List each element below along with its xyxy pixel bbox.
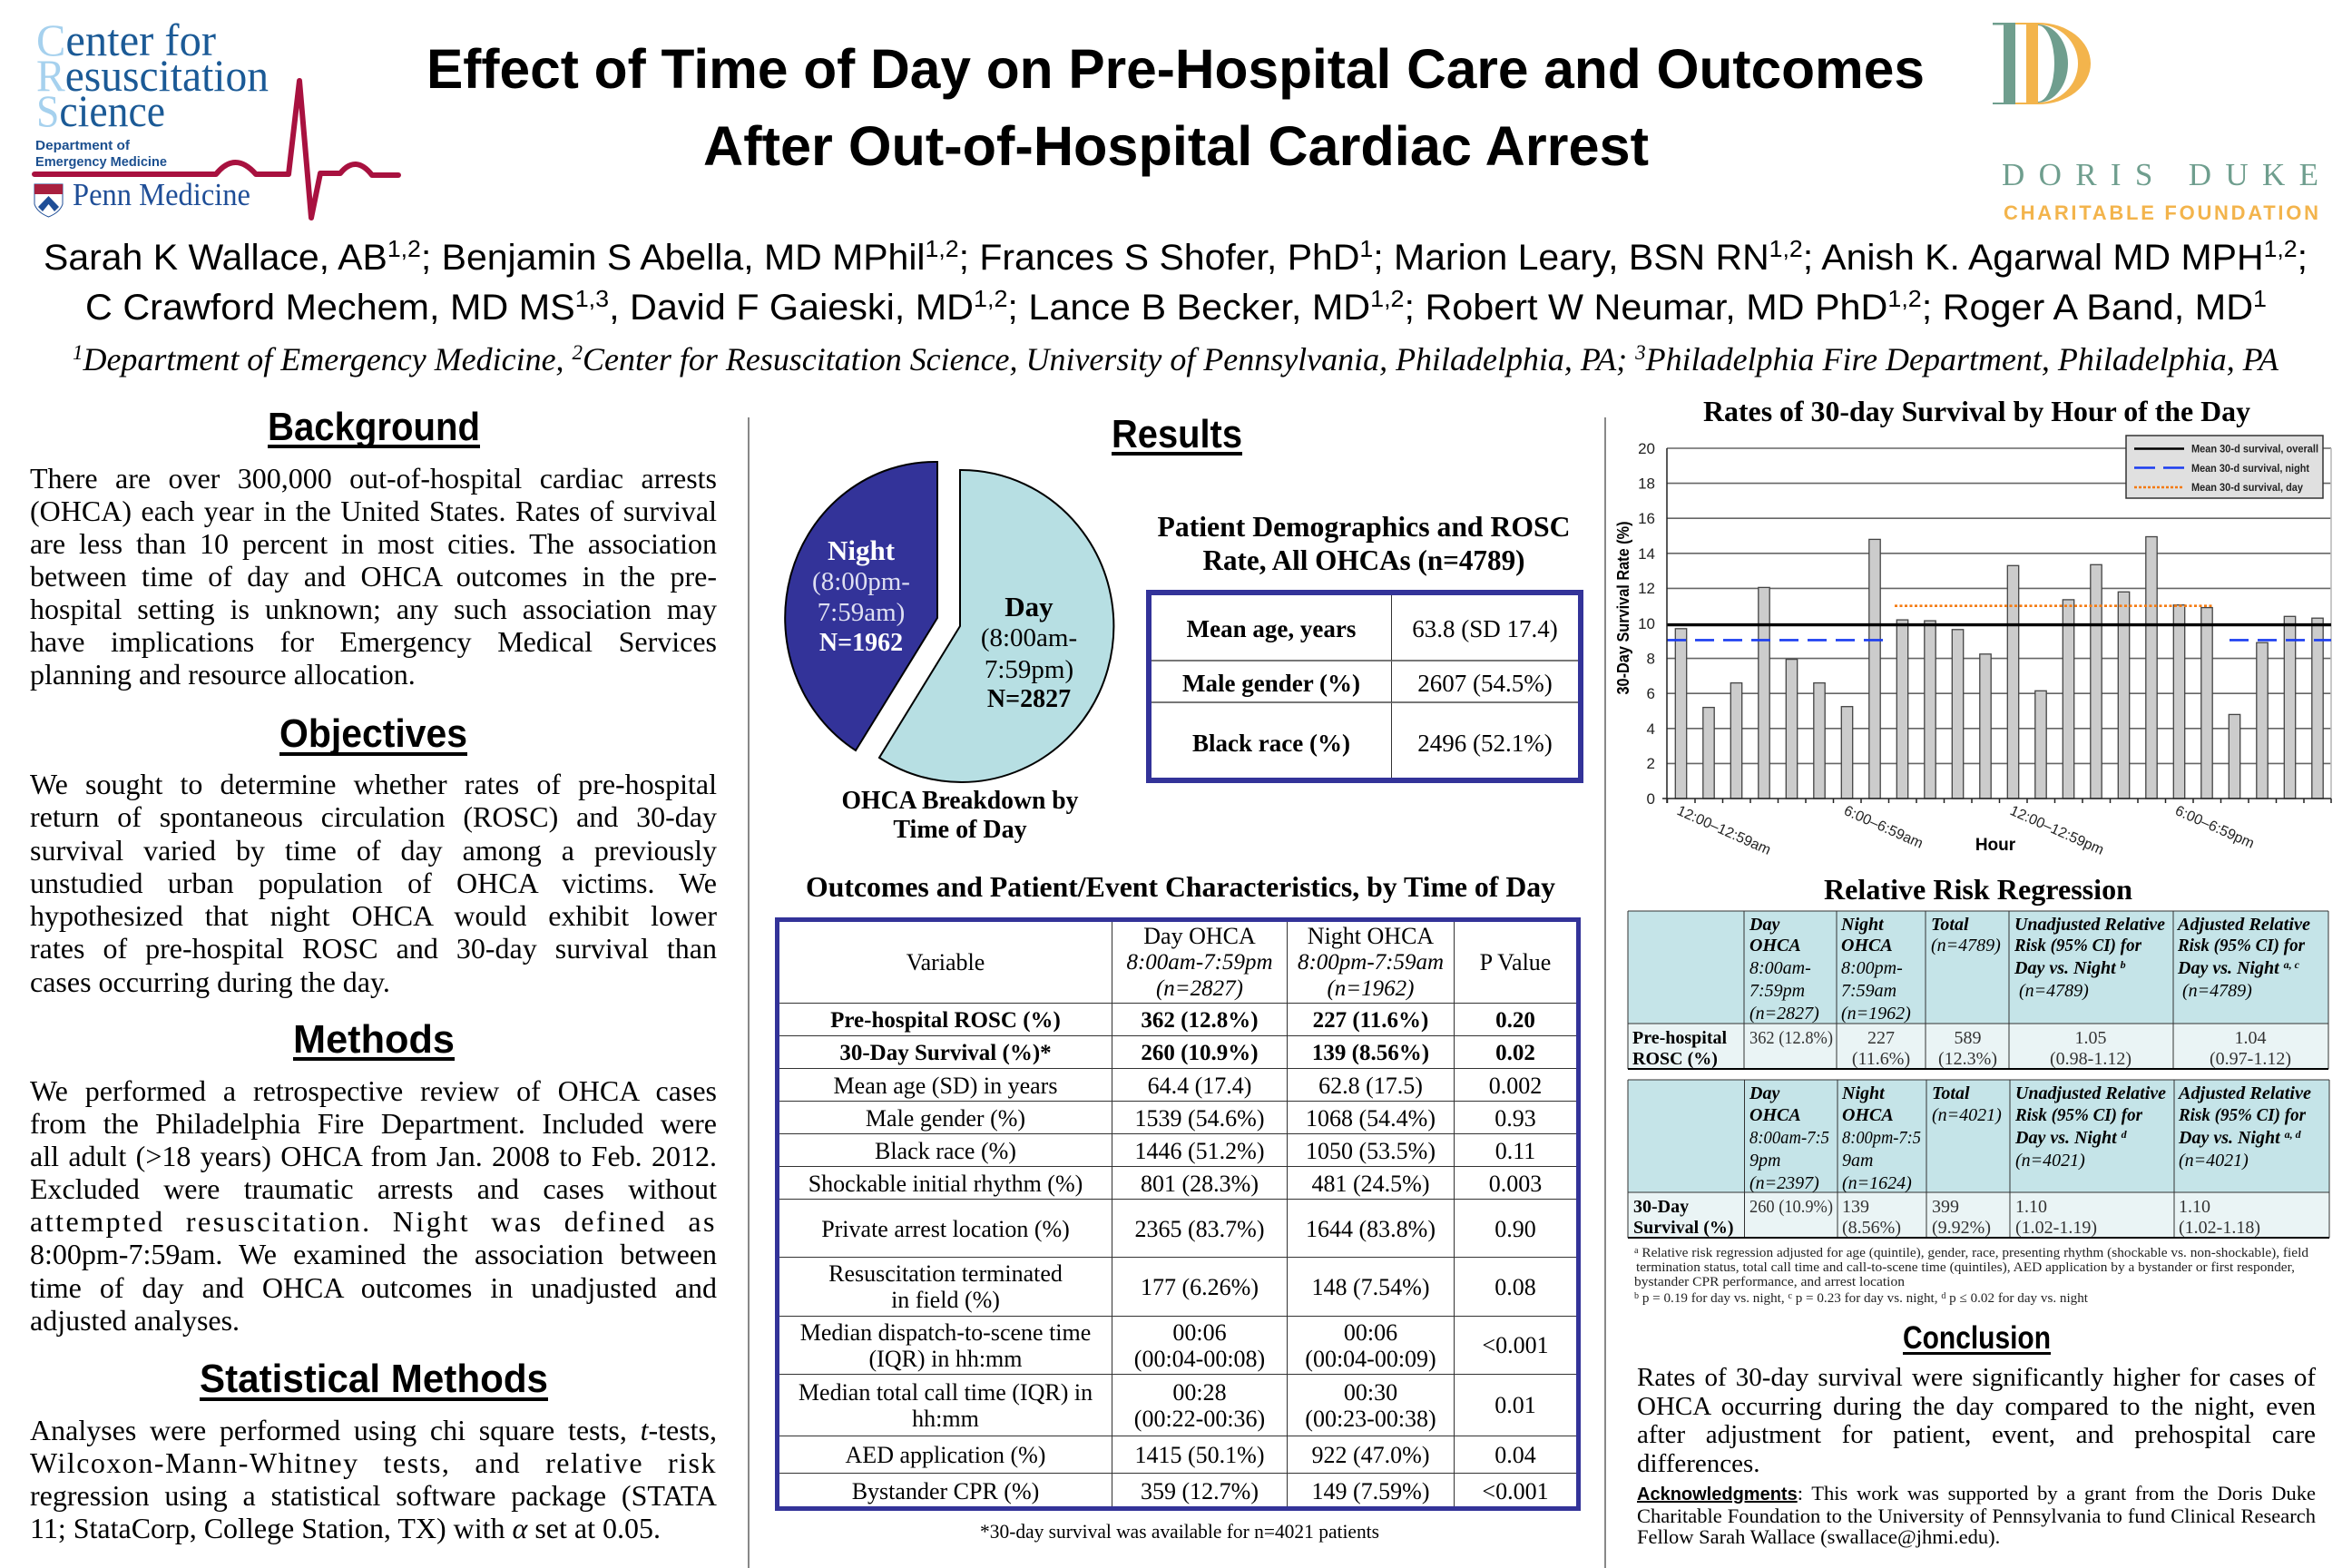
pie slice: Night: (8:00pm-	[812, 567, 910, 596]
text: Conclusion: after adjustment for patient, event, and prehospital care	[1637, 1420, 2316, 1449]
table: outcomes and patient/event characteristics: 0.01	[1494, 1392, 1536, 1418]
y axis labels	[1638, 440, 1655, 808]
text: Objectives: hypothesized that night OHCA would exhibit lower	[30, 899, 717, 932]
affiliations: 3	[1634, 341, 1646, 364]
table: outcomes and patient/event characteristics: 00:28	[1172, 1379, 1227, 1405]
table: patient demographics: 63.8 (SD 17.4)	[1412, 615, 1558, 642]
regression footnotes: a	[1634, 1246, 1639, 1256]
text: Methods: 8:00pm-7:59am. We examined the association between	[30, 1238, 717, 1270]
table: relative risk for 30-day survival: Day vs. Night	[2179, 1128, 2280, 1148]
text: Methods: Excluded were traumatic arrests and cases without	[30, 1172, 717, 1205]
heading: Background: Background	[268, 405, 480, 449]
affiliations: 1	[73, 341, 83, 364]
table: relative risk for 30-day survival: 8:00am-7:5	[1749, 1128, 1829, 1148]
text: Methods: all adult (>18 years) OHCA from Jan. 2008 to Feb. 2012.	[30, 1140, 717, 1172]
heading: Patient Demographics: Rate, All OHCAs (n=4789)	[1203, 544, 1524, 576]
table: relative risk for pre-hospital ROSC: Total	[1931, 915, 1969, 935]
title: After Out-of-Hospital Cardiac Arrest	[703, 115, 1649, 177]
table: outcomes and patient/event characteristics: 801 (28.3%)	[1141, 1171, 1259, 1197]
heading: Patient Demographics: Patient Demographics and ROSC	[1158, 510, 1570, 543]
table: outcomes and patient/event characteristics: 0.20	[1495, 1008, 1535, 1033]
regression footnotes: Relative risk regression adjusted for age (quintile), gender, race, presenting rhythm (shockable vs. non-shockable), field	[1639, 1246, 2309, 1260]
text: Background: (OHCA) each year in the United States. Rates of survival	[30, 495, 717, 527]
text: Conclusion: OHCA occurring during the day compared to the night, even	[1637, 1392, 2316, 1421]
table: outcomes and patient/event characteristics: 362 (12.8%)	[1141, 1008, 1259, 1033]
regression footnotes: p = 0.19 for day vs. night,	[1639, 1291, 1788, 1306]
table: relative risk for pre-hospital ROSC: Pre-hospital	[1632, 1028, 1728, 1048]
table: relative risk for 30-day survival: (1.02-1.18)	[2179, 1218, 2260, 1238]
heading: survival chart: Rates of 30-day Survival by Hour of the Day	[1703, 395, 2250, 427]
table: relative risk for pre-hospital ROSC: Risk (95% CI) for	[2177, 936, 2305, 956]
y axis labels: 10	[1638, 615, 1655, 632]
grid lines	[1667, 448, 2331, 799]
table: relative risk for 30-day survival: 8:00pm-7:5	[1842, 1128, 1921, 1148]
table: relative risk for pre-hospital ROSC: OHCA	[1841, 936, 1893, 956]
table: patient demographics: 2607 (54.5%)	[1417, 670, 1553, 697]
table: relative risk for 30-day survival: d	[2122, 1128, 2128, 1141]
table: outcomes and patient/event characteristics: <0.001	[1482, 1332, 1549, 1358]
authors: ; Benjamin S Abella, MD MPhil	[421, 238, 926, 278]
table: outcomes and patient/event characteristics: AED application (%)	[846, 1441, 1045, 1468]
authors: 1	[2253, 285, 2267, 312]
pie caption: Time of Day	[893, 816, 1027, 844]
text: Objectives: survival varied by time of day among a previously	[30, 834, 717, 867]
logo: Center for Resuscitation Science, Penn Medicine: Department of	[35, 138, 131, 153]
table: relative risk for pre-hospital ROSC: (n=4789)	[2182, 981, 2252, 1001]
table: relative risk for 30-day survival: Survival (%)	[1633, 1218, 1734, 1238]
y axis labels: 12	[1638, 580, 1655, 597]
text: Objectives: return of spontaneous circulation (ROSC) and 30-day	[30, 800, 717, 833]
table: outcomes and patient/event characteristics: 64.4 (17.4)	[1148, 1073, 1251, 1099]
table: outcomes and patient/event characteristics: 149 (7.59%)	[1312, 1477, 1429, 1504]
table: relative risk for pre-hospital ROSC: a, c	[2284, 958, 2300, 971]
table: relative risk for 30-day survival: 1.10	[2015, 1197, 2047, 1217]
logo: Center for Resuscitation Science, Penn Medicine: Science	[36, 85, 165, 136]
table: relative risk for 30-day survival	[1628, 1080, 2329, 1238]
table: relative risk for 30-day survival: 1.10	[2179, 1197, 2210, 1217]
authors: 1,2	[926, 235, 959, 262]
text: Statistical Methods: Wilcoxon-Mann-Whitney tests, and relative risk	[30, 1446, 717, 1479]
table: relative risk for 30-day survival: Night	[1841, 1083, 1886, 1103]
mean overall line	[1667, 623, 2331, 626]
y axis title: 30-Day Survival Rate (%)	[1614, 521, 1632, 695]
text: Methods: attempted resuscitation. Night was defined as	[30, 1205, 717, 1238]
regression footnotes: termination status, total call time and call-to-scene time (quintiles), AED application by a bystander or first responder,	[1636, 1260, 2295, 1275]
text: Methods: We performed a retrospective review of OHCA cases	[30, 1074, 717, 1107]
y axis labels: 4	[1647, 720, 1655, 738]
table: outcomes and patient/event characteristics: Day OHCA	[1143, 922, 1256, 949]
axes	[1662, 448, 2331, 803]
table: relative risk for pre-hospital ROSC: (n=4789)	[2019, 981, 2089, 1001]
table: relative risk for 30-day survival: 139	[1842, 1197, 1869, 1217]
table: outcomes and patient/event characteristics: 260 (10.9%)	[1141, 1041, 1259, 1065]
text: Background: There are over 300,000 out-of-hospital cardiac arrests	[30, 462, 717, 495]
table: relative risk for 30-day survival: (n=4021)	[1932, 1105, 2002, 1125]
table: outcomes and patient/event characteristics: in field (%)	[891, 1287, 1000, 1313]
table: outcomes and patient/event characteristics: 30-Day Survival (%)*	[839, 1041, 1052, 1065]
table: relative risk for 30-day survival: 260 (10.9%)	[1749, 1197, 1833, 1217]
authors: ; Roger A Band, MD	[1922, 288, 2253, 328]
table: relative risk for 30-day survival: OHCA	[1842, 1105, 1894, 1125]
table: outcomes and patient/event characteristics: (00:23-00:38)	[1305, 1405, 1436, 1432]
table: outcomes and patient/event characteristics: Male gender (%)	[866, 1105, 1025, 1132]
table: outcomes and patient/event characteristics: (n=2827)	[1156, 976, 1243, 1000]
outcomes footnote: *30-day survival was available for n=4021 patients	[980, 1520, 1379, 1543]
table: relative risk for 30-day survival: Total	[1932, 1083, 1970, 1103]
table: relative risk for 30-day survival: (8.56%)	[1842, 1218, 1901, 1238]
heading: Objectives: Objectives	[279, 711, 467, 756]
heading: Statistical Methods: Statistical Methods	[200, 1357, 548, 1401]
affiliations: Center for Resuscitation Science, University of Pennsylvania, Philadelphia, PA;	[583, 341, 1635, 377]
table: relative risk for pre-hospital ROSC: (n=2827)	[1749, 1004, 1819, 1024]
authors: ; Marion Leary, BSN RN	[1373, 238, 1769, 278]
table: relative risk for pre-hospital ROSC: Risk (95% CI) for	[2014, 936, 2141, 956]
text: Conclusion: differences.	[1637, 1448, 1760, 1477]
table: relative risk for pre-hospital ROSC: Adjusted Relative	[2176, 915, 2310, 935]
y axis labels: 20	[1638, 440, 1655, 457]
y axis labels: 16	[1638, 510, 1655, 527]
bars	[1675, 537, 2323, 799]
table: relative risk for pre-hospital ROSC: 8:00pm-	[1841, 958, 1903, 978]
text: Statistical Methods	[30, 1414, 717, 1544]
authors: 1,2	[387, 235, 421, 262]
text: Background	[30, 462, 717, 691]
text: Background: have implications for Emergency Medical Services	[30, 625, 717, 658]
logo: Doris Duke Charitable Foundation: CHARITABLE FOUNDATION	[2004, 201, 2318, 224]
table: outcomes and patient/event characteristics: 227 (11.6%)	[1313, 1008, 1428, 1033]
text: Acknowledgments	[1637, 1482, 2316, 1548]
regression footnotes: c	[1788, 1291, 1792, 1301]
y axis labels: 18	[1638, 475, 1655, 493]
pie slice: Day: (8:00am-	[981, 623, 1077, 652]
table: relative risk for pre-hospital ROSC: (0.98-1.12)	[2050, 1049, 2132, 1069]
table: outcomes and patient/event characteristics: hh:mm	[912, 1405, 979, 1432]
table: outcomes and patient/event characteristics: 0.04	[1494, 1441, 1536, 1468]
table: relative risk for pre-hospital ROSC: 227	[1867, 1028, 1895, 1048]
regression footnotes: p ≤ 0.02 for day vs. night	[1945, 1291, 2089, 1306]
authors: ;	[2298, 238, 2308, 278]
table: patient demographics: 2496 (52.1%)	[1417, 730, 1553, 757]
logo: Doris Duke Charitable Foundation: DORIS DUKE	[2002, 157, 2318, 192]
text: Objectives: rates of pre-hospital ROSC and 30-day survival than	[30, 932, 717, 965]
table: relative risk for 30-day survival: Day vs. Night	[2015, 1128, 2117, 1148]
text: Conclusion: Rates of 30-day survival were significantly higher for cases of	[1637, 1363, 2316, 1392]
table: relative risk for 30-day survival: (n=4021)	[2179, 1151, 2249, 1171]
chart legend: Mean 30-d survival, overall	[2191, 445, 2318, 456]
text: Background: are less than 10 percent in most cities. The association	[30, 527, 717, 560]
x axis labels: 12:00–12:59pm	[2007, 803, 2106, 858]
affiliations: 2	[573, 341, 583, 364]
text: Background: hospital setting is unknown; any such association may	[30, 593, 717, 625]
table: outcomes and patient/event characteristics: Median dispatch-to-scene time	[800, 1319, 1091, 1345]
table: outcomes and patient/event characteristics: 1050 (53.5%)	[1306, 1138, 1436, 1164]
table: outcomes and patient/event characteristics: <0.001	[1482, 1477, 1549, 1504]
text: Background: planning and resource allocation.	[30, 658, 416, 691]
heading: Relative Risk Regression: Relative Risk Regression	[1824, 873, 2132, 906]
logo: Doris Duke Charitable Foundation	[1993, 23, 2318, 224]
table: outcomes and patient/event characteristics: 00:06	[1344, 1319, 1397, 1345]
table: outcomes and patient/event characteristics: 1644 (83.8%)	[1306, 1216, 1436, 1242]
table: outcomes and patient/event characteristics: 148 (7.54%)	[1312, 1274, 1429, 1299]
mean night line	[1667, 639, 2331, 642]
text: Objectives	[30, 768, 717, 998]
table: outcomes and patient/event characteristics: 359 (12.7%)	[1141, 1477, 1259, 1504]
heading: Outcomes table: Outcomes and Patient/Event Characteristics, by Time of Day	[806, 870, 1555, 903]
table: outcomes and patient/event characteristics: 0.93	[1494, 1105, 1536, 1132]
table: patient demographics: Male gender (%)	[1182, 670, 1360, 697]
table: outcomes and patient/event characteristics: 00:30	[1344, 1379, 1397, 1405]
table: relative risk for 30-day survival: Adjusted Relative	[2177, 1083, 2311, 1103]
authors: 1	[1359, 235, 1373, 262]
logo: Center for Resuscitation Science, Penn Medicine: Emergency Medicine	[35, 154, 167, 170]
table: outcomes and patient/event characteristics: Variable	[906, 949, 985, 975]
table: outcomes and patient/event characteristics: 2365 (83.7%)	[1134, 1216, 1264, 1242]
regression footnotes: bystander CPR performance, and arrest location	[1634, 1275, 1906, 1289]
table: outcomes and patient/event characteristics: (00:22-00:36)	[1134, 1405, 1265, 1432]
table: relative risk for pre-hospital ROSC: 7:59pm	[1749, 981, 1805, 1001]
pie slice: Day: 7:59pm)	[985, 655, 1073, 684]
table: outcomes and patient/event characteristics: Resuscitation terminated	[828, 1260, 1063, 1287]
table: outcomes and patient/event characteristics: P Value	[1480, 949, 1551, 975]
pie caption	[842, 787, 1078, 844]
pie caption: OHCA Breakdown by	[842, 787, 1078, 815]
affiliations: Department of Emergency Medicine,	[82, 341, 573, 377]
title	[426, 38, 1925, 177]
table: relative risk for pre-hospital ROSC: 362 (12.8%)	[1749, 1028, 1833, 1048]
authors: 1,2	[1769, 235, 1803, 262]
table: outcomes and patient/event characteristics: Black race (%)	[875, 1138, 1016, 1164]
chart legend: Mean 30-d survival, night	[2191, 464, 2309, 475]
authors: ; Frances S Shofer, PhD	[959, 238, 1359, 278]
mean day line	[1895, 604, 2214, 607]
table: outcomes and patient/event characteristics: 0.08	[1494, 1274, 1536, 1299]
table: outcomes and patient/event characteristics: Pre-hospital ROSC (%)	[830, 1008, 1061, 1033]
table: outcomes and patient/event characteristics: Private arrest location (%)	[821, 1216, 1070, 1242]
table: relative risk for 30-day survival: Unadjusted Relative	[2015, 1083, 2166, 1103]
table: patient demographics: Black race (%)	[1192, 730, 1350, 757]
pie slice: Day: N=2827	[987, 685, 1071, 713]
table: relative risk for pre-hospital ROSC: Unadjusted Relative	[2014, 915, 2165, 935]
column divider left	[748, 417, 750, 1568]
table: outcomes and patient/event characteristics: 1539 (54.6%)	[1134, 1105, 1264, 1132]
table: relative risk for pre-hospital ROSC: 1.04	[2234, 1028, 2267, 1048]
y axis labels: 14	[1638, 545, 1655, 563]
table: relative risk for pre-hospital ROSC: OHCA	[1749, 936, 1801, 956]
y axis labels: 2	[1647, 755, 1655, 772]
logo: Center for Resuscitation Science, Penn Medicine	[34, 15, 398, 218]
table: outcomes and patient/event characteristics: 922 (47.0%)	[1312, 1441, 1429, 1468]
x axis labels: 6:00–6:59pm	[2172, 803, 2257, 852]
table: outcomes and patient/event characteristics: 0.02	[1495, 1041, 1535, 1065]
authors: 1,2	[2264, 235, 2298, 262]
table: outcomes and patient/event characteristics: Bystander CPR (%)	[852, 1477, 1039, 1504]
pie chart: OHCA breakdown by time of day	[785, 462, 1113, 782]
text: Acknowledgments: Fellow Sarah Wallace (swallace@jhmi.edu).	[1637, 1525, 2000, 1548]
table: relative risk for pre-hospital ROSC: Day vs. Night	[2014, 958, 2116, 978]
table: outcomes and patient/event characteristics: 62.8 (17.5)	[1318, 1073, 1423, 1099]
title: Effect of Time of Day on Pre-Hospital Care and Outcomes	[426, 38, 1925, 100]
table: outcomes and patient/event characteristics: (IQR) in hh:mm	[869, 1345, 1022, 1372]
regression footnotes: p = 0.23 for day vs. night,	[1792, 1291, 1941, 1306]
affiliations: Philadelphia Fire Department, Philadelphia, PA	[1645, 341, 2279, 377]
table: outcomes and patient/event characteristics: 177 (6.26%)	[1141, 1274, 1259, 1299]
table: outcomes and patient/event characteristics: (n=1962)	[1327, 976, 1415, 1000]
authors	[44, 235, 2308, 328]
table: relative risk for 30-day survival: a, d	[2285, 1128, 2302, 1141]
table: outcomes and patient/event characteristics: (00:04-00:09)	[1305, 1345, 1436, 1372]
table: outcomes and patient/event characteristics: 8:00pm-7:59am	[1298, 949, 1444, 975]
table: relative risk for pre-hospital ROSC: (n=4789)	[1931, 936, 2001, 956]
logo: Center for Resuscitation Science, Penn Medicine: Resuscitation	[36, 50, 269, 101]
authors: , David F Gaieski, MD	[609, 288, 974, 328]
text: Acknowledgments: Charitable Foundation to the University of Pennsylvania to fund Clinical Research	[1637, 1504, 2316, 1527]
authors: 1,2	[1370, 285, 1404, 312]
chart legend	[2126, 436, 2323, 498]
table: patient demographics	[1146, 590, 1583, 783]
table: relative risk for pre-hospital ROSC: (n=1962)	[1841, 1004, 1911, 1024]
table: outcomes and patient/event characteristics: 139 (8.56%)	[1312, 1041, 1429, 1065]
y axis labels: 8	[1647, 651, 1655, 668]
table: outcomes and patient/event characteristics: 00:06	[1172, 1319, 1227, 1345]
authors: ; Robert W Neumar, MD PhD	[1404, 288, 1887, 328]
authors: 1,2	[1887, 285, 1922, 312]
text: Methods	[30, 1074, 717, 1337]
text: Background: between time of day and OHCA outcomes in the pre-	[30, 560, 717, 593]
table: relative risk for pre-hospital ROSC	[1628, 911, 2328, 1069]
table: relative risk for pre-hospital ROSC: (0.97-1.12)	[2210, 1049, 2291, 1069]
table: outcomes and patient/event characteristics: (00:04-00:08)	[1134, 1345, 1265, 1372]
column divider right	[1604, 417, 1606, 1568]
chart legend: Mean 30-d survival, day	[2191, 483, 2304, 494]
table: outcomes and patient/event characteristics: 0.11	[1495, 1138, 1535, 1164]
pie slice: Day	[879, 470, 1113, 782]
regression footnotes: d	[1941, 1291, 1945, 1301]
x axis labels	[1674, 803, 2257, 858]
text: Methods: time of day and OHCA outcomes in unadjusted and	[30, 1271, 717, 1304]
heading: Patient Demographics	[1158, 510, 1570, 576]
text: Statistical Methods: 11; StataCorp, College Station, TX) with α set at 0.05.	[30, 1512, 661, 1544]
x axis title: Hour	[1975, 836, 2016, 855]
authors: C Crawford Mechem, MD MS	[85, 288, 559, 328]
table: relative risk for pre-hospital ROSC: (11.6%)	[1852, 1049, 1910, 1069]
table: relative risk for 30-day survival: Risk (95% CI) for	[2178, 1105, 2306, 1125]
table: outcomes and patient/event characteristics	[775, 917, 1581, 1511]
table: outcomes and patient/event characteristics: Shockable initial rhythm (%)	[808, 1171, 1083, 1197]
table: relative risk for 30-day survival: (n=1624)	[1842, 1173, 1912, 1193]
text: Methods: from the Philadelphia Fire Department. Included were	[30, 1107, 717, 1140]
table: relative risk for pre-hospital ROSC: 8:00am-	[1749, 958, 1811, 978]
table: relative risk for 30-day survival: 9am	[1842, 1151, 1873, 1171]
authors: Sarah K Wallace, AB	[44, 238, 379, 278]
table: relative risk for pre-hospital ROSC: (12.3%)	[1938, 1049, 1997, 1069]
regression footnotes: b	[1634, 1291, 1639, 1301]
table: relative risk for pre-hospital ROSC: b	[2121, 958, 2126, 971]
table: relative risk for 30-day survival: Risk (95% CI) for	[2014, 1105, 2142, 1125]
text: Statistical Methods: Analyses were performed using chi square tests, t-tests,	[30, 1414, 717, 1446]
text: Statistical Methods: regression using a statistical software package (STATA	[30, 1479, 717, 1512]
authors: 1,2	[974, 285, 1007, 312]
heading: Conclusion: Conclusion	[1903, 1320, 2051, 1356]
authors: 1,3	[575, 285, 609, 312]
table: relative risk for 30-day survival: 9pm	[1749, 1151, 1780, 1171]
table: outcomes and patient/event characteristics: Median total call time (IQR) in	[799, 1379, 1093, 1405]
table: relative risk for pre-hospital ROSC: 7:59am	[1841, 981, 1896, 1001]
y axis labels: 0	[1647, 790, 1655, 808]
table: relative risk for pre-hospital ROSC: Day	[1749, 915, 1779, 935]
pie slice: Night: 7:59am)	[818, 598, 905, 627]
table: outcomes and patient/event characteristics: 8:00am-7:59pm	[1126, 949, 1273, 975]
text: Objectives: unstudied urban population of OHCA victims. We	[30, 867, 717, 899]
x axis labels: 12:00–12:59am	[1674, 803, 1773, 858]
table: relative risk for pre-hospital ROSC: 1.05	[2074, 1028, 2107, 1048]
table: relative risk for 30-day survival: (1.02-1.19)	[2015, 1218, 2097, 1238]
table: relative risk for 30-day survival: (9.92%)	[1932, 1218, 1991, 1238]
table: outcomes and patient/event characteristics: Mean age (SD) in years	[834, 1073, 1057, 1099]
table: outcomes and patient/event characteristics: Night OHCA	[1308, 922, 1434, 949]
table: relative risk for pre-hospital ROSC: 589	[1955, 1028, 1982, 1048]
x axis labels: 6:00–6:59am	[1841, 803, 1926, 852]
text: Objectives: cases occurring during the day.	[30, 965, 390, 998]
heading: Methods: Methods	[293, 1017, 455, 1062]
table: relative risk for pre-hospital ROSC: Night	[1840, 915, 1885, 935]
pie slice: Night	[785, 462, 937, 750]
table: outcomes and patient/event characteristics: 481 (24.5%)	[1312, 1171, 1429, 1197]
heading: Results: Results	[1112, 412, 1242, 456]
authors: ; Anish K. Agarwal MD MPH	[1803, 238, 2264, 278]
table: outcomes and patient/event characteristics: 0.003	[1489, 1171, 1542, 1197]
pie slice: Night: N=1962	[819, 629, 903, 657]
table: outcomes and patient/event characteristics: 1446 (51.2%)	[1134, 1138, 1264, 1164]
table: relative risk for 30-day survival: 30-Day	[1633, 1197, 1689, 1217]
pie slice: Day: Day	[1004, 591, 1054, 622]
regression footnotes	[1634, 1246, 2309, 1306]
text: Objectives: We sought to determine whether rates of pre-hospital	[30, 768, 717, 800]
authors: ; Lance B Becker, MD	[1007, 288, 1370, 328]
logo: Center for Resuscitation Science, Penn Medicine: Penn Medicine	[73, 177, 250, 212]
table: patient demographics: Mean age, years	[1187, 615, 1356, 642]
table: relative risk for 30-day survival: (n=4021)	[2015, 1151, 2085, 1171]
table: outcomes and patient/event characteristics: 1068 (54.4%)	[1306, 1105, 1436, 1132]
table: relative risk for 30-day survival: OHCA	[1749, 1105, 1801, 1125]
bar chart: 30-day survival by hour	[1614, 436, 2331, 858]
table: outcomes and patient/event characteristics: 1415 (50.1%)	[1134, 1441, 1264, 1468]
text: Conclusion	[1637, 1363, 2316, 1477]
y axis labels: 6	[1647, 685, 1655, 702]
table: relative risk for pre-hospital ROSC: ROSC (%)	[1632, 1049, 1718, 1069]
table: relative risk for pre-hospital ROSC: Day vs. Night	[2178, 958, 2279, 978]
text: Methods: adjusted analyses.	[30, 1304, 240, 1337]
table: relative risk for 30-day survival: (n=2397)	[1749, 1173, 1819, 1193]
text: Acknowledgments: Acknowledgments: This work was supported by a grant from the Doris Duke	[1637, 1482, 2316, 1504]
table: outcomes and patient/event characteristics: 0.90	[1494, 1216, 1536, 1242]
table: relative risk for 30-day survival: Day	[1749, 1083, 1779, 1103]
pie slice: Night: Night	[828, 534, 896, 566]
logo: Center for Resuscitation Science, Penn Medicine: Center for	[36, 15, 216, 65]
table: relative risk for 30-day survival: 399	[1932, 1197, 1959, 1217]
table: outcomes and patient/event characteristics: 0.002	[1489, 1073, 1542, 1099]
